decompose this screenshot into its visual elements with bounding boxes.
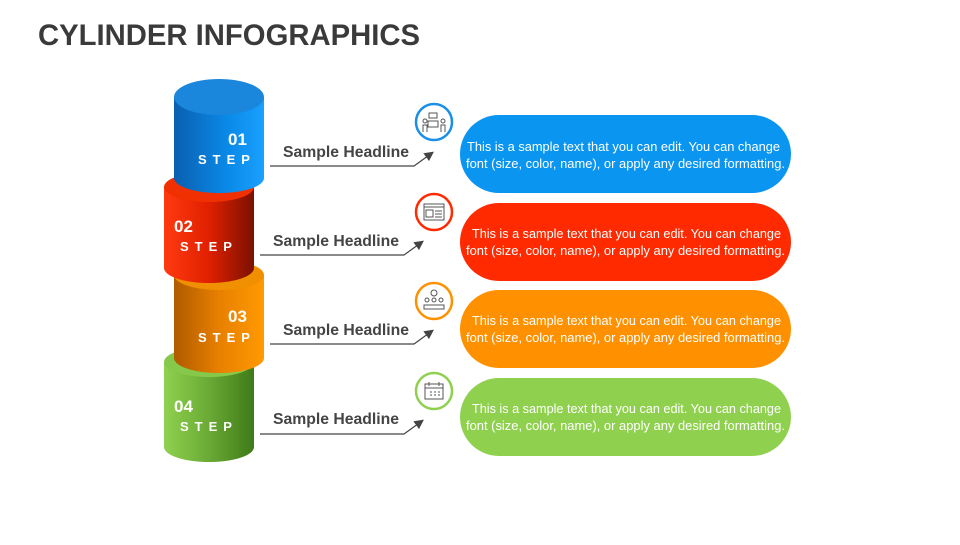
step 3 headline and arrow: Sample Headline <box>283 322 409 339</box>
cylinder 1 <box>174 79 264 193</box>
cylinder 2: STEP <box>180 239 238 254</box>
pill 2 <box>460 203 791 281</box>
step 3 headline and arrow <box>270 322 432 344</box>
cylinder 2 <box>164 172 254 283</box>
pill 4: This is a sample text that you can edit. You can change <box>472 402 781 416</box>
step 1 headline and arrow: Sample Headline <box>283 144 409 161</box>
cylinder 4: STEP <box>180 419 238 434</box>
icon: team <box>416 283 452 319</box>
cylinder 1: 01 <box>228 130 247 149</box>
cylinder 2: 02 <box>174 217 193 236</box>
cylinder 4: 04 <box>174 397 193 416</box>
title: CYLINDER INFOGRAPHICS <box>38 19 420 52</box>
icon: meeting <box>416 104 452 140</box>
pill 3: This is a sample text that you can edit. You can change <box>472 314 781 328</box>
step 4 headline and arrow: Sample Headline <box>273 411 399 428</box>
pill 1: This is a sample text that you can edit. You can change <box>467 140 780 154</box>
icon: calendar <box>416 373 452 409</box>
pill 2: font (size, color, name), or apply any desired formatting. <box>466 244 785 258</box>
cylinder 3: 03 <box>228 307 247 326</box>
pill 4 <box>460 378 791 456</box>
cylinder 4 <box>164 347 254 462</box>
pill 1 <box>460 115 791 193</box>
step 2 headline and arrow: Sample Headline <box>273 233 399 250</box>
pill 4: font (size, color, name), or apply any desired formatting. <box>466 419 785 433</box>
pill 2: This is a sample text that you can edit. You can change <box>472 227 781 241</box>
cylinder 3 <box>174 260 264 373</box>
step 2 headline and arrow <box>260 233 422 255</box>
step 1 headline and arrow <box>270 144 432 166</box>
pill 3: font (size, color, name), or apply any desired formatting. <box>466 331 785 345</box>
cylinder 3: STEP <box>198 330 256 345</box>
step 4 headline and arrow <box>260 411 422 434</box>
cylinder 1: STEP <box>198 152 256 167</box>
icon: browser <box>416 194 452 230</box>
pill 3 <box>460 290 791 368</box>
pill 1: font (size, color, name), or apply any desired formatting. <box>466 157 785 171</box>
